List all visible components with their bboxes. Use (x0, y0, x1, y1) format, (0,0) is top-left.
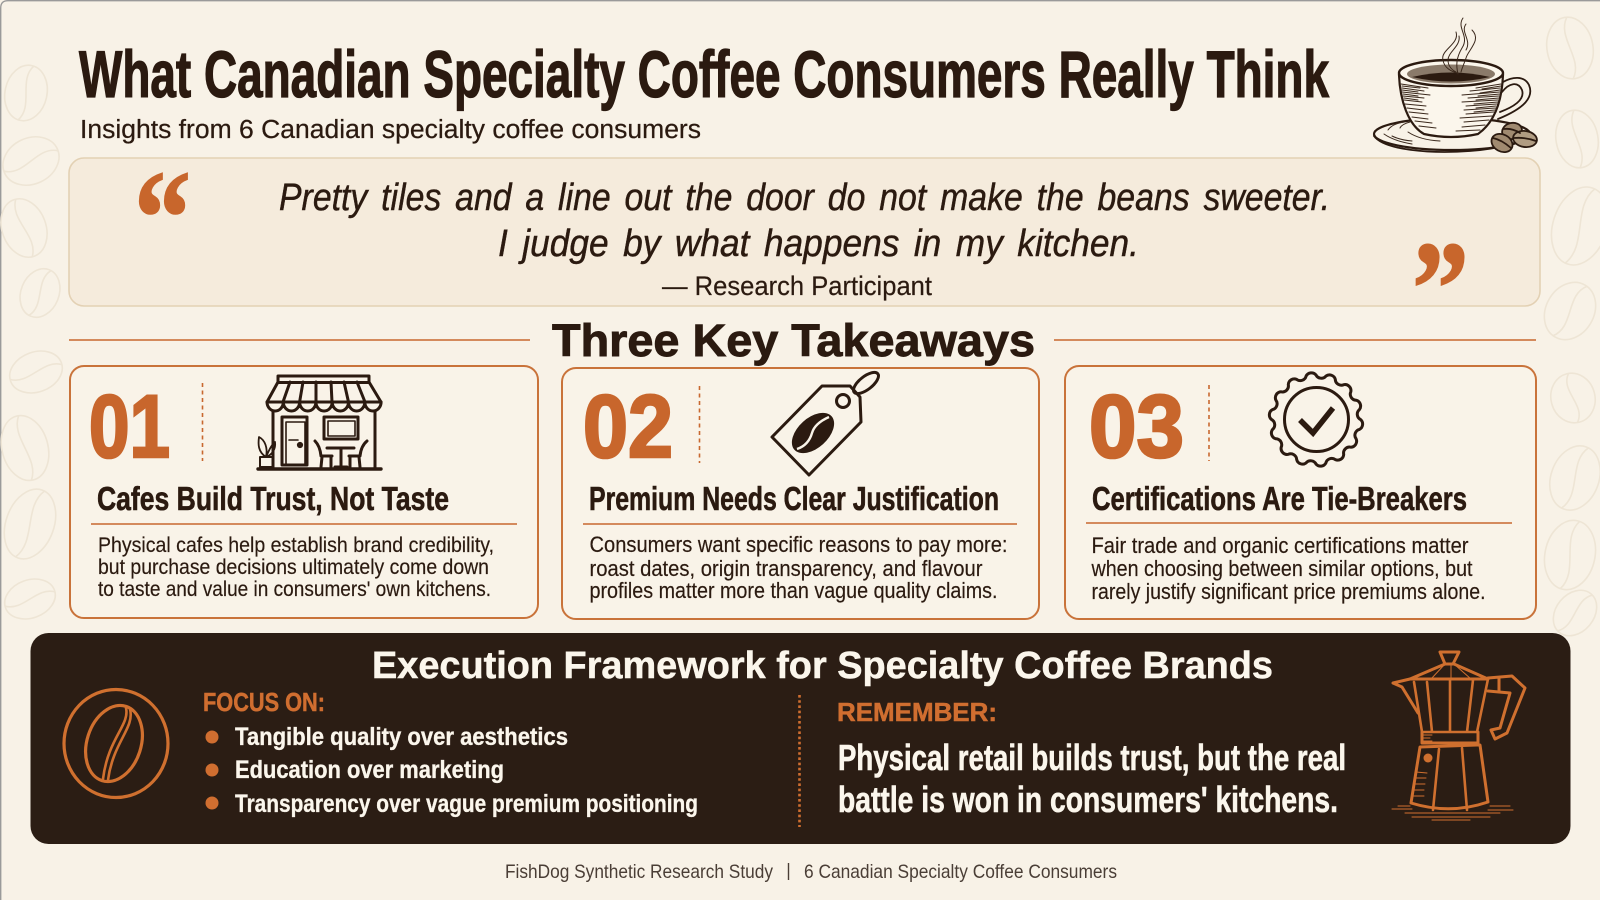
card body text: profiles matter more than vague quality claims. (590, 578, 998, 603)
card body text: Consumers want specific reasons to pay more: (590, 532, 1008, 557)
focus on list: Transparency over vague premium positioning (235, 790, 698, 818)
number 01: 01 (89, 376, 170, 476)
quote text: Pretty tiles and a line out the door do not make the beans sweeter. (279, 177, 1330, 219)
background coffee beans pattern (0, 13, 1600, 644)
card heading: Premium Needs Clear Justification (589, 480, 999, 517)
icon: coffee cup with saucer, beans and steam (1374, 18, 1538, 156)
footer: FishDog Synthetic Research Study (505, 861, 773, 883)
icon: moka pot (1392, 652, 1525, 820)
remember callout: REMEMBER: (837, 697, 997, 727)
panel: takeaway 01 (70, 366, 538, 618)
remember callout: Physical retail builds trust, but the real (838, 737, 1346, 778)
focus on list: Education over marketing (235, 756, 504, 784)
card heading: Certifications Are Tie-Breakers (1092, 480, 1467, 517)
number 02: 02 (583, 376, 673, 476)
icon: certification badge (1269, 373, 1363, 466)
subtitle: Insights from 6 Canadian specialty coffee consumers (80, 116, 701, 144)
card body text: Physical cafes help establish brand credibility, (98, 533, 494, 557)
card body text (98, 533, 494, 601)
card body text: roast dates, origin transparency, and flavour (590, 556, 982, 581)
closing quotation mark: ” (1412, 215, 1469, 364)
icon: coffee bean in circle (64, 690, 168, 798)
panel: takeaway 03 (1065, 366, 1536, 619)
card body text: rarely justify significant price premiums alone. (1092, 579, 1486, 604)
panel: execution framework (30, 633, 1570, 844)
focus on list: Tangible quality over aesthetics (235, 723, 568, 751)
card body text (590, 532, 1008, 603)
card body text: Fair trade and organic certifications matter (1092, 533, 1468, 558)
opening quotation mark: “ (134, 144, 191, 293)
icon: price tag with coffee bean (772, 369, 882, 475)
panel: participant quote (69, 144, 1540, 364)
quote attribution: — Research Participant (662, 271, 933, 301)
framework heading: Execution Framework for Specialty Coffee Brands (372, 645, 1273, 687)
remember callout (837, 697, 1346, 820)
card body text: but purchase decisions ultimately come down (98, 555, 489, 579)
card body text: when choosing between similar options, but (1091, 556, 1472, 581)
footer (505, 861, 1117, 883)
focus on list: FOCUS ON: (203, 687, 325, 717)
card heading: Cafes Build Trust, Not Taste (97, 480, 449, 517)
panel: takeaway 02 (562, 368, 1039, 619)
card body text: to taste and value in consumers' own kitchens. (98, 577, 491, 601)
section heading: three key takeaways: Three Key Takeaways (552, 315, 1035, 366)
panel: participant quote: I judge by what happens in my kitchen. (498, 223, 1139, 265)
footer: 6 Canadian Specialty Coffee Consumers (804, 861, 1117, 883)
card body text (1091, 533, 1486, 604)
icon: cafe storefront (258, 376, 381, 469)
focus on list (203, 687, 698, 818)
remember callout: battle is won in consumers' kitchens. (838, 779, 1338, 820)
number 03: 03 (1089, 376, 1184, 476)
